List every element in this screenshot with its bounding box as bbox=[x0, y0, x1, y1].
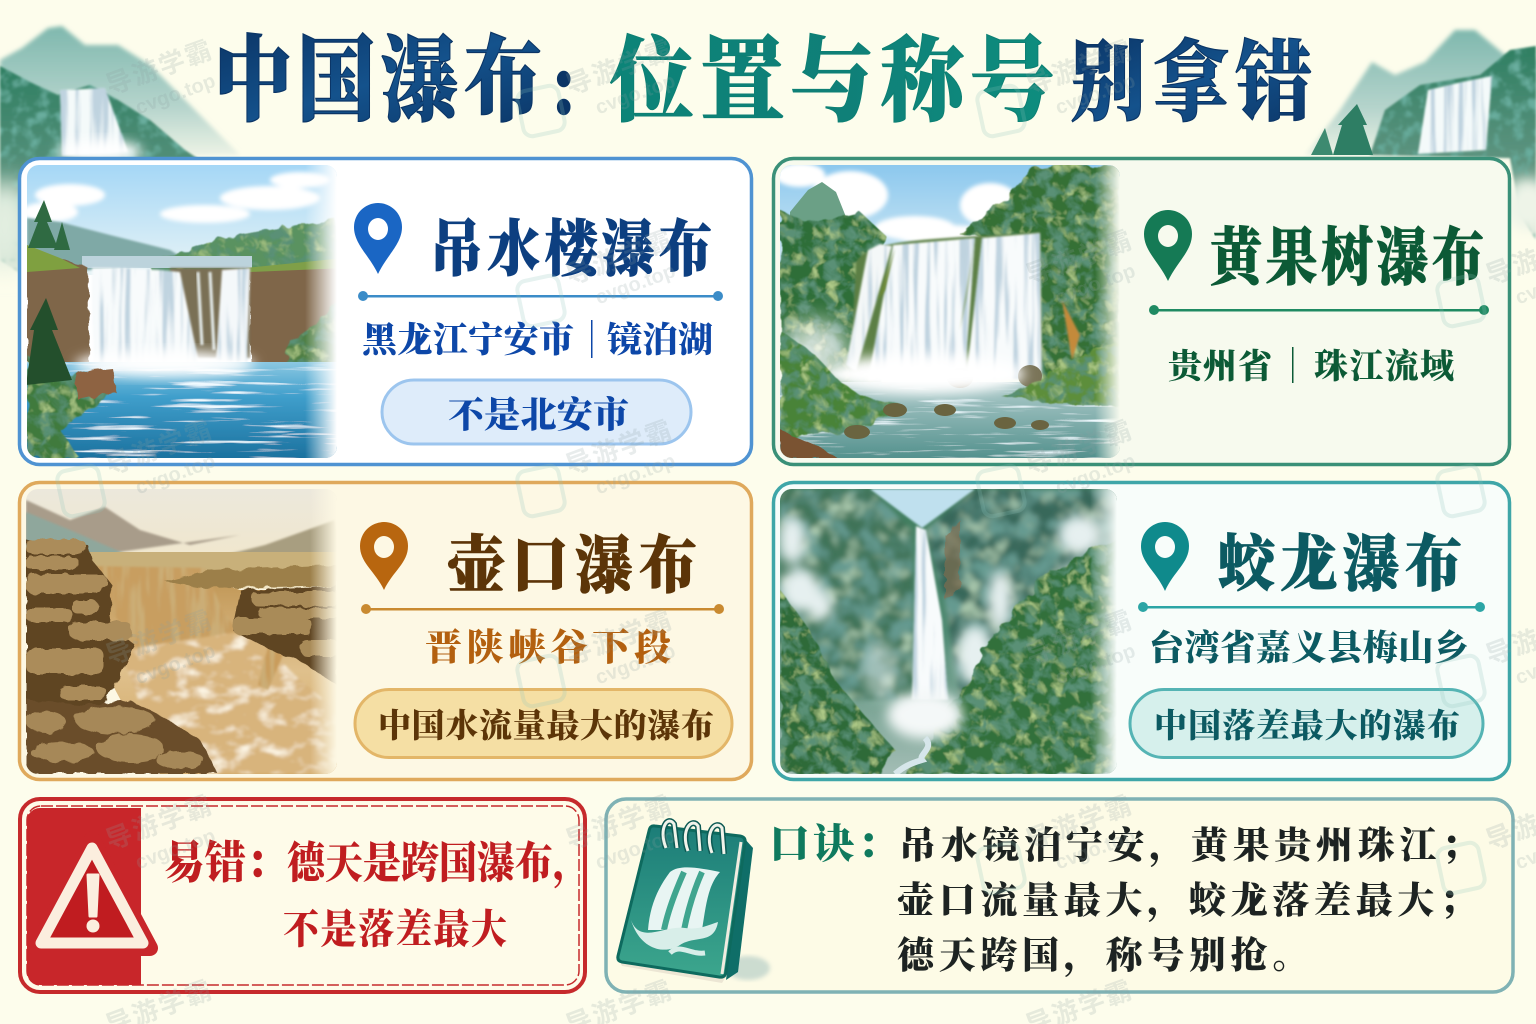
watermarks: cvgo.top bbox=[1053, 260, 1138, 309]
mnemonic label: 口诀： bbox=[769, 811, 901, 870]
title: 位置与称号 bbox=[610, 31, 1054, 134]
watermarks: 导游学霸 bbox=[1022, 225, 1135, 291]
icon: location pin bbox=[1141, 522, 1189, 591]
icon: warning triangle bbox=[36, 839, 150, 948]
watermarks: 导游学霸 bbox=[562, 225, 675, 291]
waterfall illustration: 蛟龙 bbox=[778, 489, 1117, 774]
warning text bbox=[164, 827, 591, 952]
location text bbox=[1168, 347, 1454, 386]
icon: waterfall notebook bbox=[618, 821, 770, 983]
watermarks: cvgo.top bbox=[133, 825, 218, 874]
panel: 蛟龙瀑布 bbox=[774, 482, 1510, 780]
location text: 镜泊湖 bbox=[607, 321, 713, 360]
warning text: 易错： bbox=[164, 827, 287, 892]
watermarks: cvgo.top bbox=[593, 260, 678, 309]
watermarks: cvgo.top bbox=[133, 450, 218, 499]
pill: 不是北安市: 不是北安市 bbox=[448, 394, 629, 435]
pill: 中国水流量最大的瀑布 bbox=[355, 690, 732, 758]
icon: location pin bbox=[354, 203, 402, 274]
heading: 吊水楼瀑布: 吊水楼瀑布 bbox=[430, 217, 712, 284]
mnemonic text: 吊水镜泊宁安，黄果贵州珠江； bbox=[899, 815, 1483, 869]
watermarks: cvgo.top bbox=[593, 640, 678, 689]
panel: 壶口瀑布 bbox=[20, 482, 752, 780]
panel: 黄果树瀑布 bbox=[774, 158, 1510, 464]
waterfall illustration: 黄果树 bbox=[775, 163, 1120, 462]
divider bbox=[358, 291, 723, 301]
pill: 中国水流量最大的瀑布: 中国水流量最大的瀑布 bbox=[378, 708, 714, 745]
panel: mnemonic bbox=[606, 799, 1513, 992]
heading: 蛟龙瀑布: 蛟龙瀑布 bbox=[1218, 530, 1462, 598]
watermarks: cvgo.top bbox=[133, 70, 218, 119]
watermarks: 导游学霸 bbox=[102, 605, 215, 671]
pill: 中国落差最大的瀑布: 中国落差最大的瀑布 bbox=[1154, 708, 1460, 745]
watermarks: 导游学霸 bbox=[562, 35, 675, 101]
watermarks: 导游学霸 bbox=[102, 35, 215, 101]
watermarks: 导游学霸 bbox=[562, 790, 675, 856]
location text: 台湾省嘉义县梅山乡 bbox=[1149, 628, 1469, 668]
warning text: 德天是跨国瀑布， bbox=[287, 828, 591, 891]
watermarks: 导游学霸 bbox=[562, 415, 675, 481]
watermarks: 导游学霸 bbox=[1022, 790, 1135, 856]
pill: 中国落差最大的瀑布 bbox=[1130, 690, 1483, 758]
watermarks: 导游学霸 bbox=[1022, 605, 1135, 671]
watermarks: 导游学霸 bbox=[1022, 35, 1135, 101]
mnemonic text: 壶口流量最大，蛟龙落差最大； bbox=[897, 870, 1481, 924]
watermarks: cvgo.top bbox=[1053, 70, 1138, 119]
title bbox=[214, 29, 1312, 134]
watermarks: cvgo.top bbox=[593, 70, 678, 119]
pill: 不是北安市 bbox=[382, 380, 691, 444]
location text: 晋陕峡谷下段 bbox=[425, 627, 671, 669]
location text: 黑龙江宁安市 bbox=[362, 320, 574, 360]
divider bbox=[361, 604, 724, 614]
panel: 吊水楼瀑布 bbox=[20, 158, 752, 464]
right corner landscape bbox=[1305, 30, 1536, 240]
watermarks: 导游学霸 bbox=[102, 790, 215, 856]
title: 别拿错 bbox=[1070, 35, 1312, 132]
heading: 壶口瀑布: 壶口瀑布 bbox=[447, 532, 697, 602]
left corner landscape bbox=[0, 26, 240, 280]
watermarks: cvgo.top bbox=[593, 450, 678, 499]
watermarks: 导游学霸 bbox=[102, 415, 215, 481]
icon: location pin bbox=[1144, 210, 1192, 281]
watermarks: 导游学霸 bbox=[562, 605, 675, 671]
waterfall illustration: 吊水楼 bbox=[22, 165, 345, 462]
icon: location pin bbox=[360, 522, 408, 590]
watermarks: cvgo.top bbox=[593, 825, 678, 874]
title: 中国瀑布 bbox=[214, 29, 542, 134]
divider bbox=[1138, 602, 1485, 612]
location text bbox=[362, 320, 713, 360]
location text: 贵州省 bbox=[1168, 348, 1274, 386]
watermarks: cvgo.top bbox=[1053, 825, 1138, 874]
mnemonic text bbox=[897, 815, 1483, 979]
watermarks: cvgo.top bbox=[133, 640, 218, 689]
location text: 珠江流域 bbox=[1314, 348, 1454, 386]
panel: common mistake warning bbox=[20, 799, 591, 992]
watermarks: 导游学霸 bbox=[1022, 415, 1135, 481]
title: : bbox=[552, 37, 576, 133]
warning text: 不是落差最大 bbox=[283, 907, 507, 952]
heading: 黄果树瀑布: 黄果树瀑布 bbox=[1210, 224, 1484, 293]
waterfall illustration: 壶口 bbox=[26, 489, 345, 774]
watermarks: cvgo.top bbox=[1053, 450, 1138, 499]
mnemonic text: 德天跨国，称号别抢。 bbox=[897, 925, 1314, 979]
divider bbox=[1149, 305, 1489, 315]
watermarks: cvgo.top bbox=[1053, 640, 1138, 689]
